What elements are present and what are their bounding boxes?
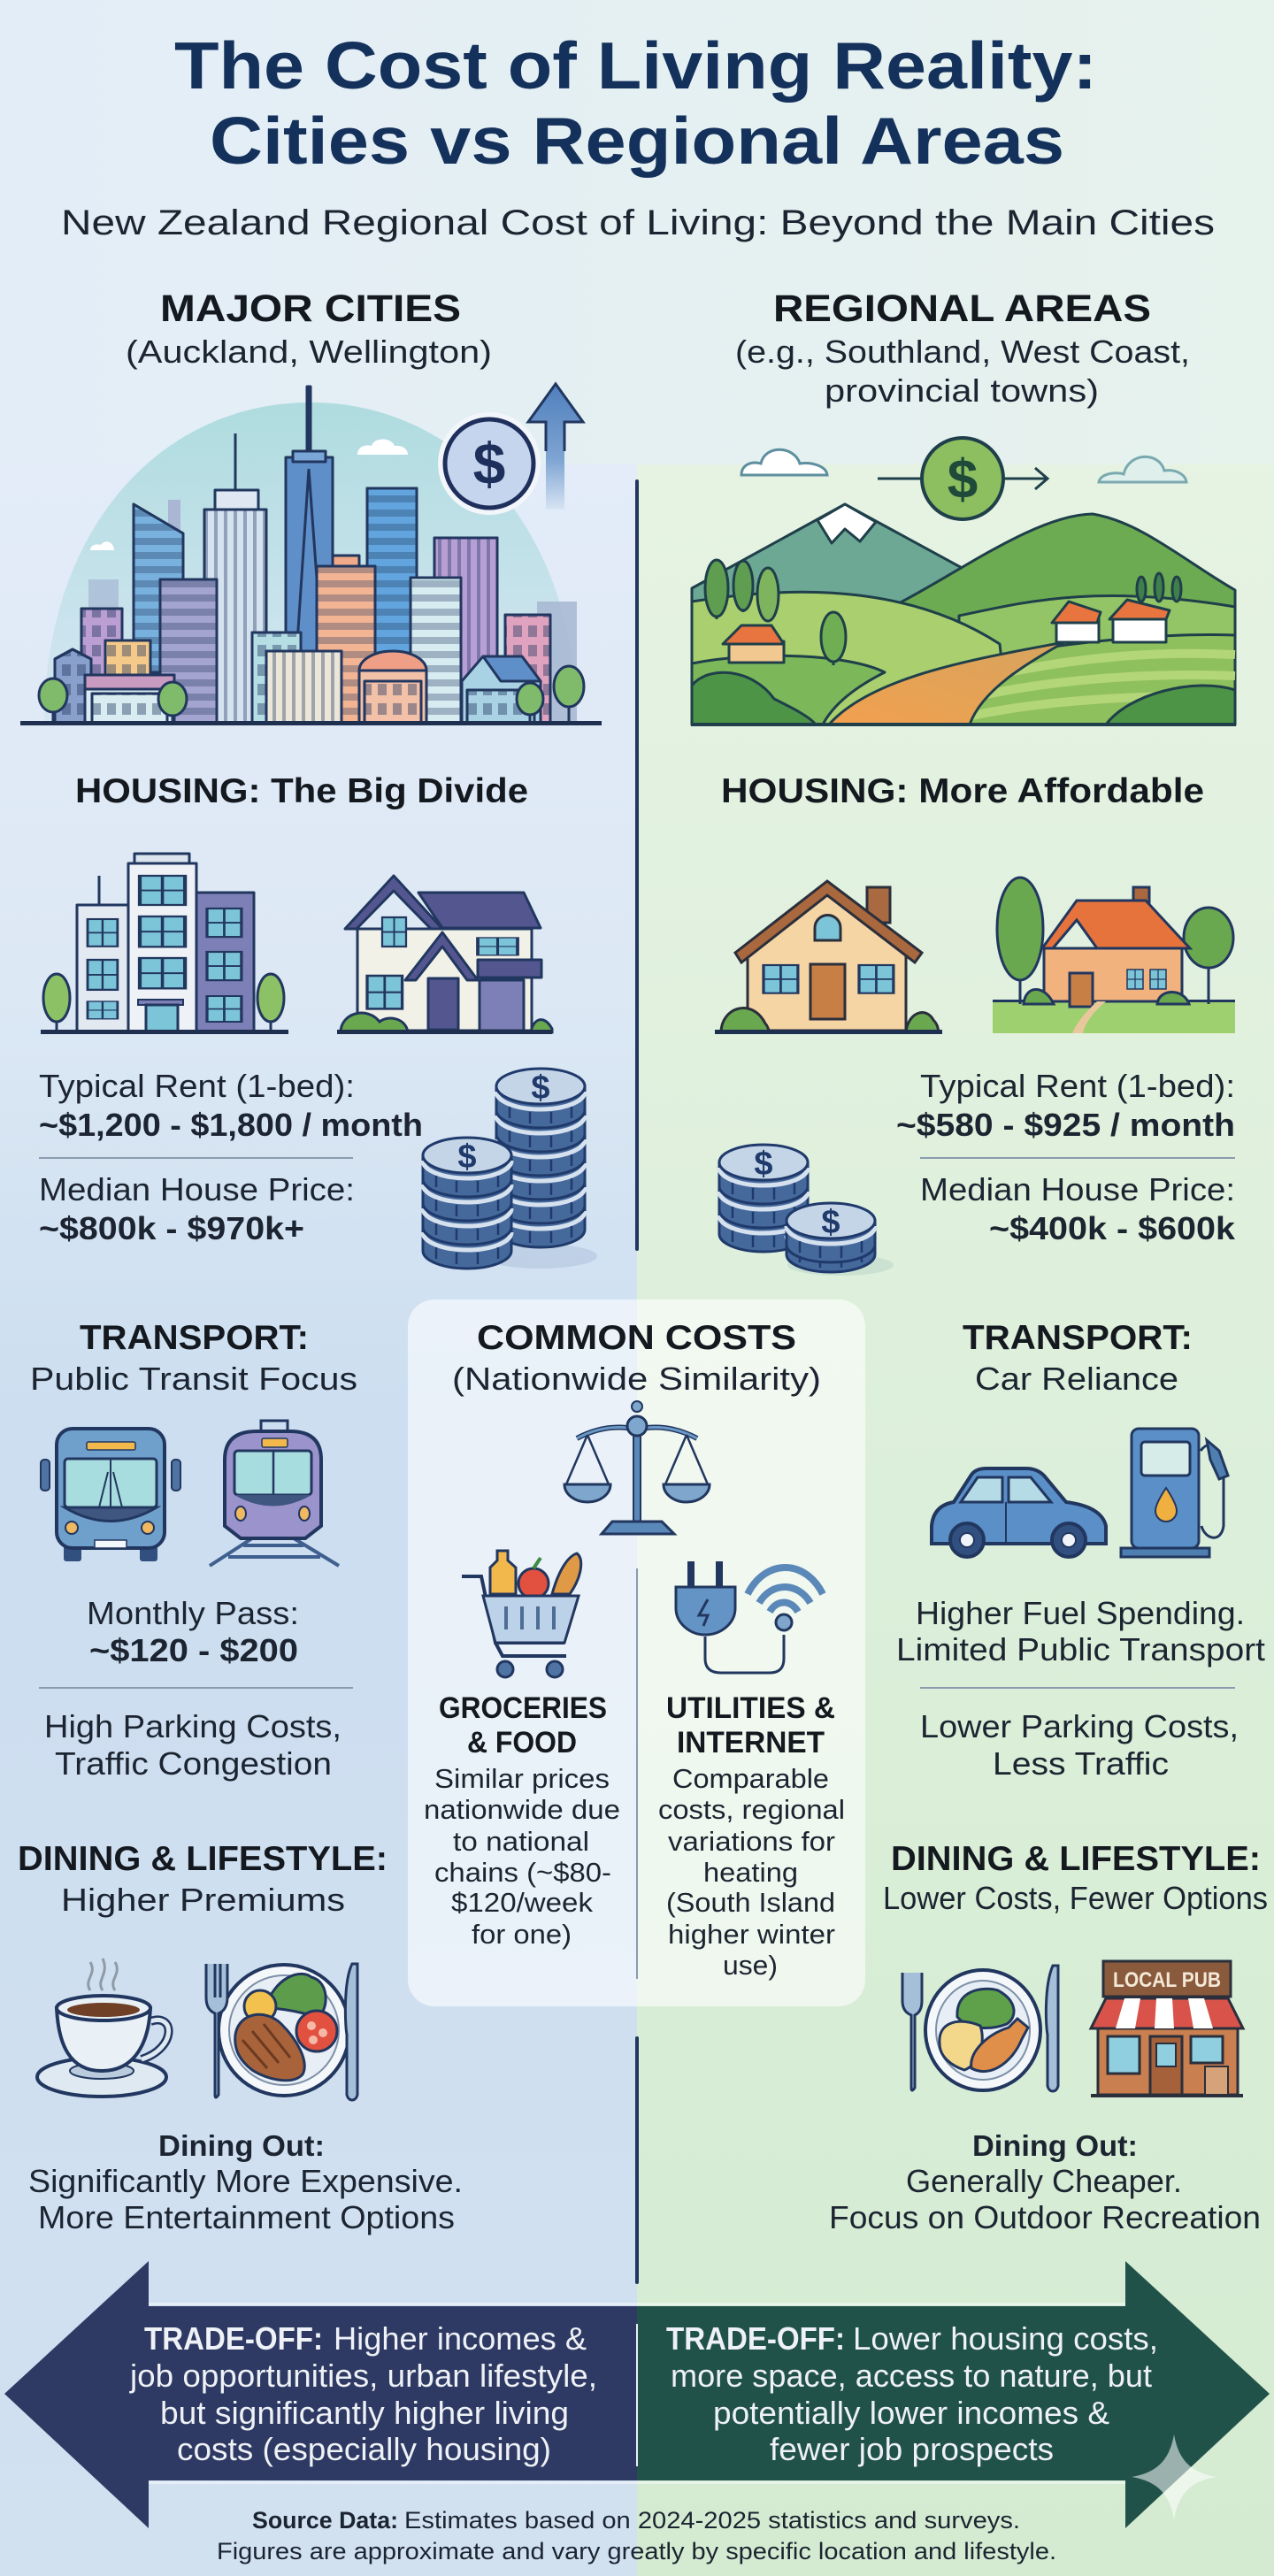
stats: right transport: Less Traffic <box>993 1745 1169 1782</box>
arrow: trade-off left <box>4 2261 637 2528</box>
heading: dining right: Lower Costs, Fewer Options <box>883 1880 1268 1916</box>
icon: chicken plate <box>902 1966 1058 2091</box>
text: utilities: (South Island <box>666 1887 835 1918</box>
cloud <box>357 439 408 455</box>
text: dining left <box>28 2129 463 2235</box>
text: groceries: for one) <box>472 1919 572 1950</box>
stats: left housing: ~$1,200 - $1,800 / month <box>39 1107 423 1143</box>
icon: plug and wifi <box>676 1561 823 1673</box>
arrow centre divider <box>636 2324 638 2466</box>
text: groceries: nationwide due <box>424 1794 620 1825</box>
panel: common costs <box>408 1300 865 2006</box>
heading: regional areas <box>735 288 1190 409</box>
text: trade-off left: job opportunities, urban lifestyle, <box>129 2358 597 2394</box>
text: utilities: UTILITIES & <box>666 1691 835 1725</box>
text: dining left: More Entertainment Options <box>38 2199 455 2235</box>
stats: right housing: Median House Price: <box>920 1171 1235 1208</box>
source note: Figures are approximate and vary greatly by specific location and lifestyle. <box>217 2538 1056 2564</box>
lavender striped <box>160 579 217 724</box>
title: The Cost of Living Reality: <box>174 28 1097 103</box>
text: groceries: to national <box>453 1826 589 1857</box>
title: Cities vs Regional Areas <box>210 104 1064 178</box>
stats: right transport: Lower Parking Costs, <box>920 1708 1239 1744</box>
centre divider lower <box>635 2036 639 2284</box>
icon: car <box>932 1468 1106 1557</box>
stats: left housing: ~$800k - $970k+ <box>39 1210 304 1246</box>
stats: left transport <box>39 1595 353 1782</box>
pale stripe tower <box>411 578 461 724</box>
heading: transport right: Car Reliance <box>975 1361 1178 1397</box>
text: trade-off right <box>666 2320 1158 2467</box>
stats: right housing <box>896 1068 1236 1246</box>
icon: short coin stacks: $ <box>754 1146 773 1183</box>
stats: left transport: Monthly Pass: <box>87 1595 299 1631</box>
red house <box>723 625 784 663</box>
stats: left transport: High Parking Costs, <box>44 1708 342 1744</box>
text: trade-off right: TRADE-OFF: <box>666 2320 845 2357</box>
source note: Source Data: <box>252 2507 398 2534</box>
trees <box>39 666 584 724</box>
text: trade-off right: more space, access to nature, but <box>671 2358 1152 2394</box>
icon: steady dollar coin <box>878 438 1048 519</box>
trees <box>705 560 1181 665</box>
text: trade-off right: potentially lower incomes & <box>713 2395 1109 2431</box>
icon: tall coin stacks: $ <box>531 1070 550 1107</box>
text: dining right <box>829 2129 1261 2235</box>
text: groceries: $120/week <box>451 1887 594 1918</box>
icon: short coin stacks: $ <box>821 1204 840 1241</box>
text: utilities: costs, regional <box>658 1794 845 1825</box>
icon: bus <box>41 1429 180 1561</box>
text: utilities: Comparable <box>672 1763 829 1794</box>
text: trade-off right: fewer job prospects <box>770 2431 1054 2467</box>
text: dining left: Significantly More Expensive. <box>28 2163 463 2199</box>
source note <box>217 2507 1056 2564</box>
fields <box>692 592 1235 724</box>
text: utilities: use) <box>723 1950 778 1981</box>
text: utilities: heating <box>703 1857 798 1888</box>
icon: tall coin stacks: $ <box>457 1138 477 1176</box>
icon: fuel pump <box>1121 1429 1228 1557</box>
icon: steady dollar coin: $ <box>948 449 978 510</box>
text: dining left: Dining Out: <box>158 2129 325 2162</box>
blue slanted tower <box>134 504 183 672</box>
icon: balance scales <box>564 1401 710 1534</box>
heading: housing left: HOUSING: The Big Divide <box>75 772 528 810</box>
icon: suburban house <box>337 876 552 1034</box>
icon: train <box>210 1421 339 1566</box>
heading: major cities <box>126 288 492 370</box>
stats: left transport: Traffic Congestion <box>55 1745 332 1782</box>
watermark star <box>1132 2434 1216 2519</box>
subtitle: New Zealand Regional Cost of Living: Beyond the Main Cities <box>61 203 1215 242</box>
stats: left housing: Median House Price: <box>39 1171 355 1208</box>
stats: right housing: Typical Rent (1-bed): <box>920 1068 1235 1104</box>
text: trade-off right: Lower housing costs, <box>853 2320 1158 2357</box>
icon: coffee cup <box>37 1959 169 2097</box>
icon: country house <box>993 878 1235 1033</box>
text: dining right: Dining Out: <box>972 2129 1138 2162</box>
text: utilities <box>658 1691 845 1981</box>
arrow: trade-off right <box>637 2261 1270 2528</box>
low buildings <box>55 632 541 724</box>
title <box>174 28 1097 178</box>
icon: rising dollar coin: $ <box>473 431 505 496</box>
heading: dining left: DINING & LIFESTYLE: <box>18 1840 388 1878</box>
text: utilities: higher winter <box>668 1919 835 1950</box>
pink tower <box>505 615 550 724</box>
text: utilities: variations for <box>668 1826 835 1857</box>
text: groceries: Similar prices <box>434 1763 610 1794</box>
text: trade-off left: costs (especially housing) <box>177 2431 551 2467</box>
text: groceries: & FOOD <box>467 1726 577 1760</box>
icon: grocery cart <box>462 1551 581 1677</box>
text: utilities: INTERNET <box>677 1726 825 1760</box>
heading: regional areas: provincial towns) <box>825 372 1099 409</box>
icon: tall coin stacks <box>423 1069 597 1269</box>
illustration: regional landscape <box>691 438 1236 726</box>
icon: local pub <box>1091 1961 1243 2097</box>
heading: major cities: MAJOR CITIES <box>160 288 461 330</box>
icon: rising dollar coin <box>438 384 583 515</box>
stats: left housing <box>39 1068 423 1246</box>
blue right tower <box>367 488 417 692</box>
heading: transport left: Public Transit Focus <box>30 1361 357 1397</box>
heading: transport right: TRANSPORT: <box>963 1319 1193 1357</box>
stats: left housing: Typical Rent (1-bed): <box>39 1068 355 1104</box>
white houses <box>1052 600 1170 642</box>
stats: right housing: ~$580 - $925 / month <box>896 1107 1235 1143</box>
heading: common costs: COMMON COSTS <box>477 1319 796 1357</box>
stats: right transport: Limited Public Transport <box>896 1631 1265 1668</box>
text: trade-off left: Higher incomes & <box>334 2320 587 2357</box>
stats: right housing: ~$400k - $600k <box>989 1210 1236 1246</box>
heading: housing right: HOUSING: More Affordable <box>721 772 1204 810</box>
clouds <box>741 449 827 475</box>
centre divider upper <box>635 479 639 1251</box>
ground line <box>20 721 602 725</box>
stats: right transport: Higher Fuel Spending. <box>916 1595 1245 1631</box>
text: trade-off left <box>129 2320 597 2467</box>
heading: regional areas: REGIONAL AREAS <box>773 288 1151 330</box>
heading: dining left: Higher Premiums <box>61 1882 345 1918</box>
icon: apartment building <box>41 854 288 1034</box>
column divider <box>636 1568 638 1979</box>
text: groceries: chains (~$80- <box>434 1857 611 1888</box>
icon: steak plate <box>206 1964 357 2100</box>
salmon tower <box>317 556 375 724</box>
heading: transport left <box>30 1319 357 1397</box>
heading: common costs <box>452 1319 821 1397</box>
stats: left transport: ~$120 - $200 <box>89 1632 298 1668</box>
striped tower <box>204 433 266 724</box>
heading: major cities: (Auckland, Wellington) <box>126 334 492 370</box>
mauve tower <box>81 609 122 724</box>
purple tower <box>434 538 497 724</box>
text: trade-off left: but significantly higher living <box>160 2395 569 2431</box>
tall tower <box>286 387 333 724</box>
icon: cottage <box>715 881 942 1034</box>
source note: Estimates based on 2024-2025 statistics and surveys. <box>404 2507 1020 2534</box>
heading: transport left: TRANSPORT: <box>80 1319 309 1357</box>
stats: right transport <box>896 1595 1265 1782</box>
mountains <box>692 504 1235 672</box>
heading: dining right: DINING & LIFESTYLE: <box>891 1840 1261 1878</box>
text: dining right: Focus on Outdoor Recreation <box>829 2199 1261 2235</box>
text: groceries <box>424 1691 620 1950</box>
illustration: city skyline <box>20 384 602 725</box>
text: dining right: Generally Cheaper. <box>906 2163 1182 2199</box>
heading: dining left <box>18 1840 388 1918</box>
heading: regional areas: (e.g., Southland, West Coast, <box>735 334 1190 370</box>
text: trade-off left: TRADE-OFF: <box>144 2320 323 2357</box>
heading: dining right <box>883 1840 1268 1916</box>
text: groceries: GROCERIES <box>439 1691 607 1725</box>
heading: common costs: (Nationwide Similarity) <box>452 1361 821 1397</box>
heading: transport right <box>963 1319 1193 1397</box>
icon: local pub: LOCAL PUB <box>1113 1968 1221 1992</box>
icon: short coin stacks <box>719 1145 894 1276</box>
